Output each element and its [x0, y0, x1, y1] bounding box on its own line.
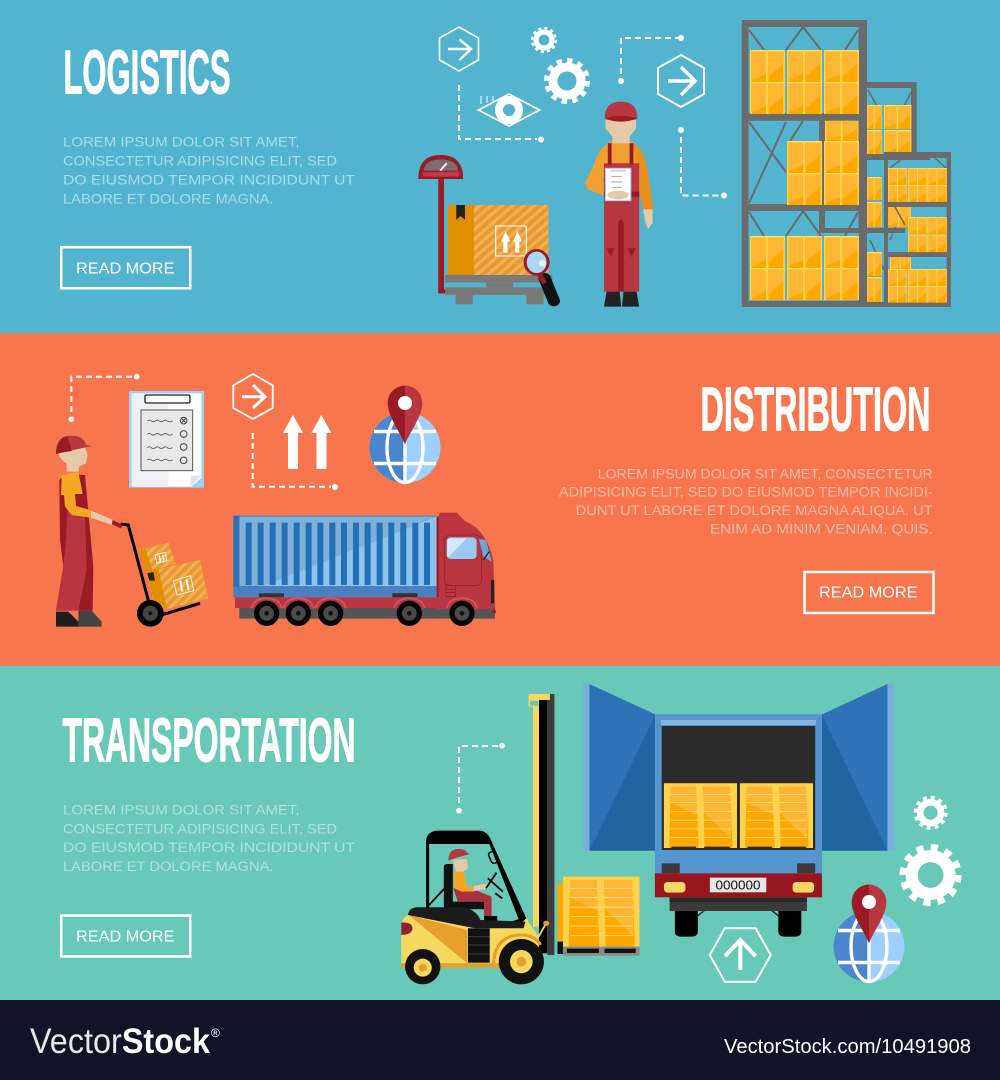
text block: logistics description: DO EIUSMOD TEMPOR INCIDIDUNT UT: [63, 172, 355, 188]
icon: large gear: [903, 847, 958, 903]
button: read more: READ MORE: [76, 928, 174, 945]
left door: [583, 683, 655, 851]
text block: transportation description: LOREM IPSUM DOLOR SIT AMET,: [63, 801, 300, 817]
hand truck with boxes: [112, 520, 208, 627]
container truck: [233, 513, 496, 626]
clipboard: [606, 168, 631, 201]
scale with parcel and magnifier: [418, 155, 554, 304]
icon: dial scale: [418, 155, 463, 293]
wheels: [405, 939, 544, 984]
forks and pallet load: [557, 877, 639, 956]
button: read more: [804, 572, 934, 613]
text block: distribution description: [559, 465, 933, 536]
worker with clipboard: [585, 102, 653, 307]
text block: logistics description: LOREM IPSUM DOLOR SIT AMET,: [63, 134, 300, 150]
cab frame: [426, 831, 526, 927]
seat: [444, 864, 484, 909]
scale platform: [445, 275, 552, 304]
text block: transportation description: LABORE ET DOLORE MAGNA.: [63, 858, 274, 874]
warehouse shelves: [742, 20, 951, 307]
icon: hexagon arrow: [233, 374, 273, 419]
text block: logistics description: CONSECTETUR ADIPISICING ELIT, SED: [63, 153, 337, 169]
button: read more: [61, 916, 190, 956]
back rack with boxes: [819, 82, 930, 307]
icon: magnifier: [525, 250, 554, 301]
button: read more: [61, 247, 190, 288]
front right rack with boxes: [884, 152, 951, 307]
text block: distribution description: ENIM AD MINIM VENIAM, QUIS.: [710, 520, 933, 536]
connector: dashed top left: [68, 374, 140, 422]
connector: dashed from hexagon: [459, 85, 544, 142]
connector: dashed to arrows: [253, 433, 338, 490]
logo: registered mark: ®: [211, 1026, 220, 1040]
panel: logistics: LOGISTICS: [64, 38, 230, 108]
button: read more: READ MORE: [819, 585, 918, 602]
panel: transportation: [0, 666, 1000, 1000]
icon: globe with location pin: [834, 884, 904, 982]
icon: small gear: [915, 798, 946, 828]
text block: transportation description: CONSECTETUR ADIPISICING ELIT, SED: [63, 820, 337, 836]
text block: distribution description: ADIPISICING ELIT, SED DO EIUSMOD TEMPOR INCIDI-: [559, 484, 933, 500]
icon: eye: [478, 94, 540, 126]
icon: hexagon arrow large: [658, 55, 704, 107]
right door: [822, 683, 894, 851]
icon: large gear: [546, 60, 588, 102]
icon: globe with location pin: [370, 386, 440, 483]
panel: distribution: [0, 333, 1000, 666]
connector: dashed top: [618, 35, 684, 84]
body: [401, 915, 539, 963]
image id text: VectorStock.com/10491908: [724, 1036, 971, 1058]
main rack with boxes: [742, 20, 867, 307]
icon: hexagon up arrow: [710, 928, 771, 982]
text block: logistics description: [63, 134, 355, 207]
text block: transportation description: [63, 801, 355, 874]
icon: small gear: [532, 28, 556, 52]
heading: transportation: TRANSPORTATION: [62, 706, 356, 776]
footer bar: [0, 1000, 1000, 1080]
checklist clipboard: [129, 391, 204, 488]
connector: dashed: [456, 743, 505, 814]
text block: logistics description: LABORE ET DOLORE MAGNA.: [63, 191, 274, 207]
connector: dashed to shelves: [678, 127, 727, 198]
worker pushing hand truck: [56, 436, 113, 627]
panel: logistics: [0, 0, 1000, 333]
text block: distribution description: DUNT UT LABORE ET DOLORE MAGNA ALIQUA. UT: [576, 502, 933, 518]
text block: distribution description: LOREM IPSUM DOLOR SIT AMET, CONSECTETUR: [598, 465, 933, 481]
parcel box: [448, 205, 548, 275]
icon: up arrows: [283, 415, 332, 469]
driver: [448, 849, 503, 921]
button: read more: READ MORE: [76, 260, 174, 277]
mast: [528, 694, 554, 955]
license plate number: 000000: [716, 878, 760, 892]
forklift: [401, 694, 639, 984]
logo: VectorStock: VectorStock: [30, 1022, 210, 1061]
icon: hexagon arrow small: [440, 27, 478, 71]
text block: transportation description: DO EIUSMOD TEMPOR INCIDIDUNT UT: [63, 839, 355, 855]
delivery truck rear: [583, 683, 894, 937]
